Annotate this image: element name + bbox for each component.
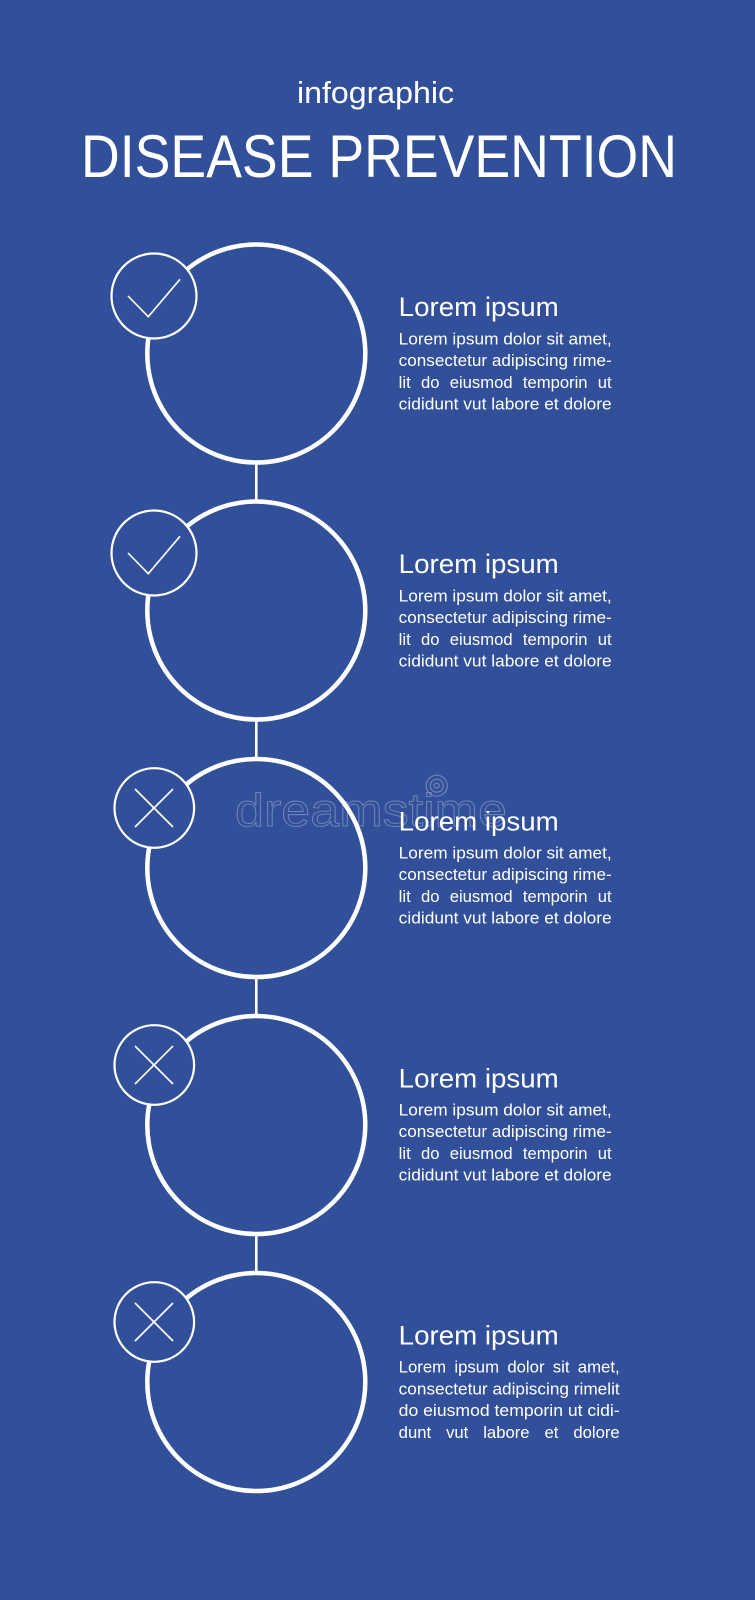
step 3 text (399, 844, 612, 928)
step 1 badge: check mark (112, 254, 196, 338)
step 4 text: consectetur adipiscing rime- (399, 1123, 612, 1141)
step 5 badge: cross (114, 1282, 194, 1362)
step 4 text: Lorem ipsum dolor sit amet, (399, 1102, 612, 1120)
step 5 text: do eiusmod temporin ut cidi- (399, 1402, 620, 1420)
step 5 (114, 1273, 620, 1491)
step 2 text: consectetur adipiscing rime- (399, 609, 612, 627)
subtitle: infographic (297, 75, 454, 110)
step 4 circle (147, 1016, 365, 1234)
step 3 text: Lorem ipsum dolor sit amet, (399, 844, 612, 862)
step 4 text: cididunt vut labore et dolore (399, 1166, 612, 1184)
step 1 text: consectetur adipiscing rime- (399, 352, 612, 370)
step 2 heading: Lorem ipsum (399, 549, 559, 579)
step 3 (114, 759, 612, 977)
step 3 circle (147, 759, 365, 977)
step 4 badge: cross (114, 1025, 194, 1105)
step 4 text (399, 1102, 612, 1184)
step 2 (112, 502, 612, 720)
step 1 circle (147, 244, 365, 462)
step 3 heading: Lorem ipsum (399, 806, 559, 836)
step 2 text: cididunt vut labore et dolore (399, 652, 612, 670)
step 3 badge: cross (114, 768, 194, 848)
connector 1 (255, 464, 258, 503)
step 3 text: lit do eiusmod temporin ut (399, 888, 612, 906)
step 2 text: lit do eiusmod temporin ut (399, 631, 612, 649)
step 3 text: consectetur adipiscing rime- (399, 866, 612, 884)
step 2 circle (147, 502, 365, 720)
step 1 text: cididunt vut labore et dolore (399, 396, 612, 414)
step 5 heading: Lorem ipsum (399, 1320, 559, 1350)
title: DISEASE PREVENTION (81, 123, 677, 190)
step 1 (112, 244, 612, 462)
step 2 text (399, 588, 612, 670)
step 1 text: lit do eiusmod temporin ut (399, 374, 612, 392)
step 2 badge: check mark (112, 510, 196, 596)
step 3 text: cididunt vut labore et dolore (399, 910, 612, 928)
step 2 text: Lorem ipsum dolor sit amet, (399, 588, 612, 606)
step 5 text: consectetur adipiscing rimelit (399, 1380, 620, 1398)
step 5 text: dunt vut labore et dolore (399, 1424, 620, 1442)
connector 4 (255, 1235, 258, 1274)
step 1 heading: Lorem ipsum (399, 292, 559, 322)
step 4 heading: Lorem ipsum (399, 1064, 559, 1094)
connector 3 (255, 978, 258, 1017)
step 1 text (399, 330, 612, 414)
step 5 text (399, 1358, 620, 1442)
step 1 text: Lorem ipsum dolor sit amet, (399, 330, 612, 348)
step 4 text: lit do eiusmod temporin ut (399, 1145, 612, 1163)
step 4 (114, 1016, 612, 1234)
watermark: dreamstime (235, 784, 507, 836)
connector 2 (255, 721, 258, 760)
step 5 circle (147, 1273, 365, 1491)
step 5 text: Lorem ipsum dolor sit amet, (399, 1358, 620, 1376)
